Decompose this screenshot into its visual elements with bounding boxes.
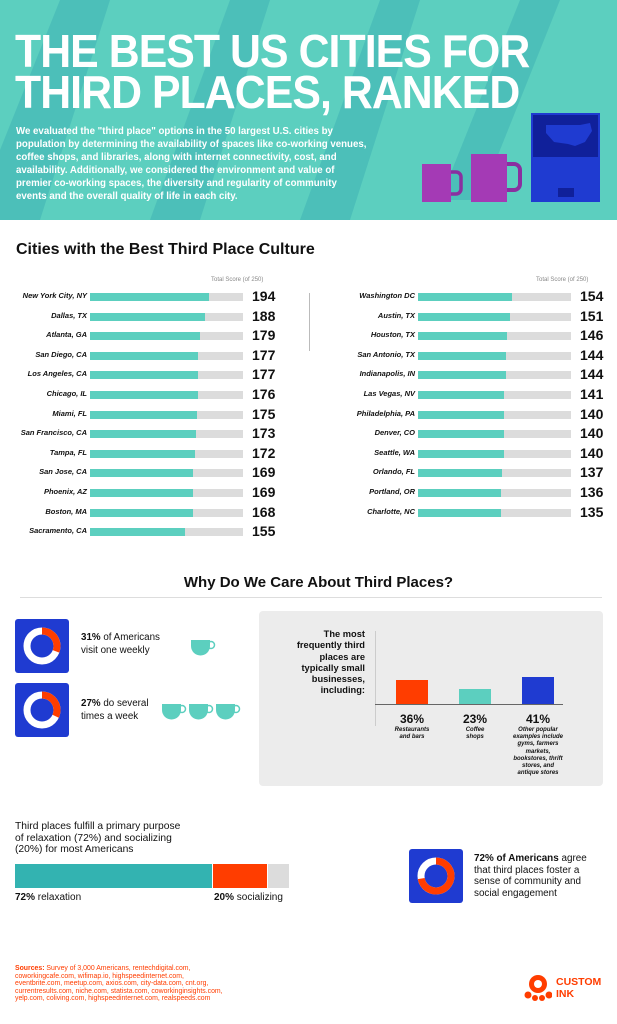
text: Boston, MA [45,507,87,516]
panel text: The most [324,629,365,639]
intro text: coffee shops, and libraries, along with internet connectivity, cost, and [16,152,337,163]
title: THIRD PLACES, RANKED [15,66,519,118]
bar chart: business types: 36% [400,712,424,726]
bar chart: left column: 194 [252,288,275,304]
intro text: availability. Additionally, we considered the environment and value of [16,165,334,176]
bar chart: right column: 135 [580,504,603,520]
title [15,25,530,118]
bar chart: left column: 173 [252,425,275,441]
section heading: why: Why Do We Care About Third Places? [184,574,453,591]
icon: mugs and laptop [422,113,600,202]
bar chart: business types: examples include [513,734,563,740]
text: Los Angeles, CA [28,369,87,378]
text: Phoenix, AZ [44,487,87,496]
text: San Diego, CA [35,350,87,359]
bar chart: business types: shops [466,734,484,740]
text: Atlanta, GA [46,330,87,339]
label: total score right: Total Score (of 250) [536,277,588,283]
bar chart: business types: Restaurants [395,727,429,733]
header panel [0,0,617,220]
bar chart: left column: 176 [252,386,275,402]
bar chart: business types: 23% [463,712,487,726]
text: Philadelphia, PA [357,409,415,418]
text: Houston, TX [371,330,415,339]
sources: coworkingcafe.com, wifimap.io, highspeedinternet.com, [15,973,184,980]
text: Las Vegas, NV [364,389,415,398]
sources: currentresults.com, niche.com, statista.com, coworkinginsights.com, [15,988,223,995]
panel text: typically small [301,663,365,673]
text: Sacramento, CA [29,526,87,535]
intro text [16,126,366,202]
stacked bar: purpose: 20% socializing [214,892,283,903]
bar chart: right column [356,288,604,520]
text: New York City, NY [23,291,87,300]
bar chart: left column: 155 [252,523,275,539]
text: San Antonio, TX [357,350,415,359]
bar chart: left column: 179 [252,327,275,343]
intro text: population by determining the availability of spaces like co-working venues, [16,139,366,150]
bar chart: right column: 137 [580,464,603,480]
bar chart: business types: antique stores [517,770,558,776]
bar chart: business types: Coffee [466,727,484,733]
text: Washington DC [359,291,415,300]
bar chart: left column: 177 [252,366,275,382]
bar chart: business types: Other popular [518,727,558,733]
text: purpose: of relaxation (72%) and socializing [15,833,172,844]
panel text [297,629,365,695]
panel text: including: [321,685,365,695]
stat: 72% community: 72% of Americans agree [474,853,587,864]
logo: custom ink [524,975,601,1001]
title: THE BEST US CITIES FOR [15,25,529,77]
bar chart: left column: 172 [252,445,275,461]
icon: three cups [162,704,240,720]
text: Denver, CO [375,428,415,437]
text: Orlando, FL [373,467,415,476]
logo: custom ink: INK [556,988,574,1000]
bar chart: right column: 146 [580,327,603,343]
text: purpose [15,821,180,855]
bar chart: left column: 169 [252,484,275,500]
bar chart: left column: 168 [252,504,275,520]
intro text: premier co-working spaces, the diversity and regularity of community [16,178,337,189]
panel: small businesses [259,611,603,786]
stat: 72% community [409,849,587,903]
text: San Jose, CA [39,467,87,476]
sources: Sources: Survey of 3,000 Americans, rentechdigital.com, [15,965,190,972]
bar chart: right column: 144 [580,366,603,382]
section heading: cities: Cities with the Best Third Place Culture [16,241,315,258]
text: Charlotte, NC [367,507,415,516]
text: Indianapolis, IN [360,369,415,378]
panel text: places are [320,652,365,662]
icon: donut 72 [409,849,463,903]
bar chart: left column: 169 [252,464,275,480]
bar chart: business types: and bars [399,734,424,740]
bar chart: right column: 144 [580,347,603,363]
bar chart: left column: 175 [252,406,275,422]
bar chart: business types: 41% [526,712,550,726]
stat: 72% community: social engagement [474,888,557,898]
bar chart: left column: 177 [252,347,275,363]
stat: 31% weekly [15,619,216,673]
stat: 27% several times: times a week [81,710,138,722]
text: purpose: Third places fulfill a primary purpose [15,821,180,832]
text: Miami, FL [52,409,87,418]
bar chart: business types: stores, and [522,763,554,769]
bar chart: right column: 140 [580,445,603,461]
bar chart: right column: 151 [580,308,603,324]
stacked bar: purpose: 72% relaxation [15,892,81,903]
label: total score left: Total Score (of 250) [211,277,263,283]
icon: donut 31 [15,619,69,673]
text: purpose: (20%) for most Americans [15,844,133,855]
panel text: businesses, [312,674,365,684]
bar chart: business types: bookstores, thrift [513,756,563,762]
bar chart: right column: 136 [580,484,603,500]
bar chart: right column: 154 [580,288,603,304]
sources: eventbrite.com, meetup.com, axios.com, city-data.com, cnt.org, [15,980,208,987]
stat: 31% weekly: visit one weekly [81,644,150,656]
text: Portland, OR [369,487,415,496]
bar chart: business types: gyms, farmers [517,741,559,747]
sources: yelp.com, coliving.com, highspeedinternet.com, realspeeds.com [15,995,210,1002]
bar chart: right column: 141 [580,386,603,402]
text: Tampa, FL [50,448,87,457]
bar chart: business types: markets, [526,749,550,755]
bar chart: left column [20,288,276,539]
icon: cup [191,640,216,656]
stat: 27% several times [15,683,240,737]
sources [15,964,223,1002]
stat: 27% several times: 27% do several [81,698,149,709]
bar chart: right column: 140 [580,406,603,422]
bar chart: business types [375,677,563,776]
icon: donut 27 [15,683,69,737]
panel text: frequently third [297,640,365,650]
text: San Francisco, CA [21,428,87,437]
stat: 31% weekly: 31% of Americans [81,632,160,643]
text: Seattle, WA [374,448,415,457]
bar chart: left column: 188 [252,308,275,324]
text: Chicago, IL [47,389,87,398]
logo: custom ink: CUSTOM [556,976,601,988]
intro text: We evaluated the "third place" options in the 50 largest U.S. cities by [16,126,333,137]
bar chart: right column: 140 [580,425,603,441]
stat: 72% community: that third places foster a [474,864,579,876]
text: Dallas, TX [51,311,87,320]
stacked bar: purpose [15,864,289,903]
text: Austin, TX [378,311,415,320]
intro text: events and the overall quality of life in each city. [16,191,238,202]
stat: 72% community: sense of community and [474,876,581,887]
